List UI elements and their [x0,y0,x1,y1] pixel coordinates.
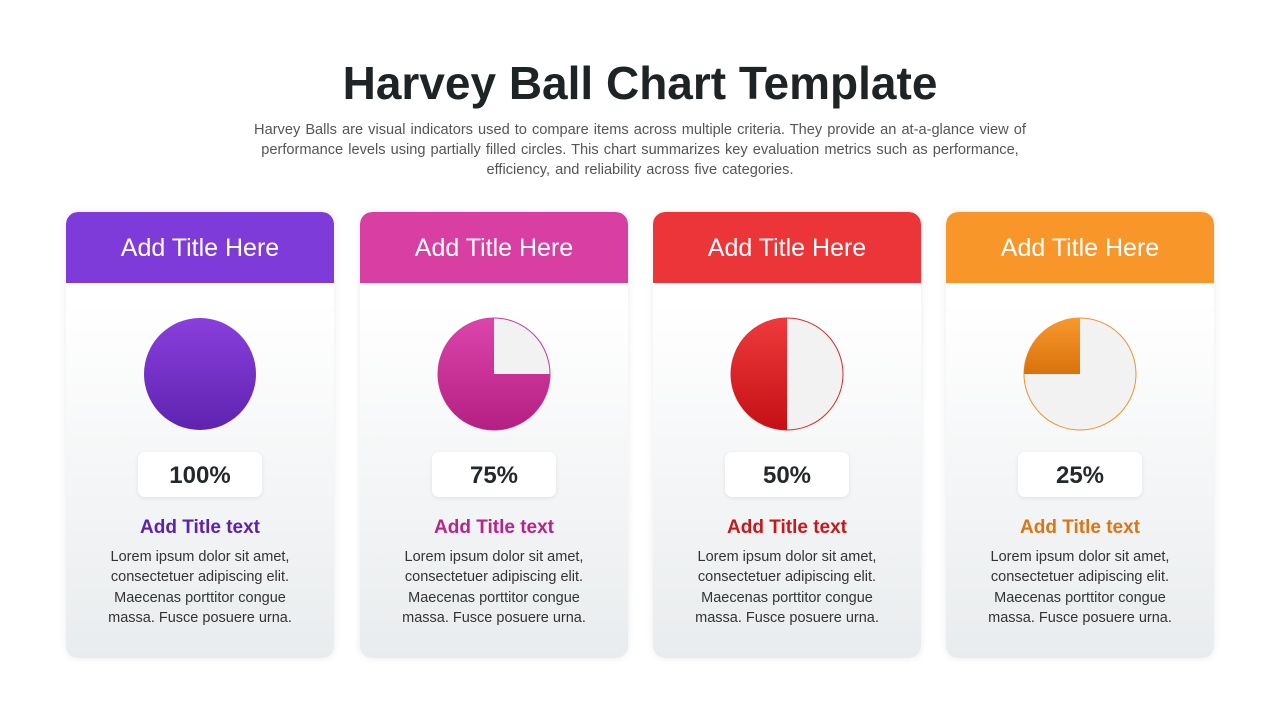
value: 25% [1056,462,1104,489]
body text: Lorem ipsum dolor sit amet, consectetuer adipiscing elit. Maecenas porttitor congue massa. Fusce posuere urna. [988,549,1172,626]
body text: Lorem ipsum dolor sit amet, consectetuer adipiscing elit. Maecenas porttitor congue massa. Fusce posuere urna. [695,549,879,626]
value [138,452,262,497]
panel: 25% [946,212,1214,658]
value [1018,452,1142,497]
icon: harvey ball 50 [730,318,844,430]
subtitle text: Add Title text [727,517,847,538]
header [946,212,1214,283]
value: 50% [763,462,811,489]
value: 75% [470,462,518,489]
panel: 75% [360,212,628,658]
header [66,212,334,283]
body text: Lorem ipsum dolor sit amet, consectetuer adipiscing elit. Maecenas porttitor congue massa. Fusce posuere urna. [402,549,586,626]
title: Harvey Ball Chart Template [343,57,937,109]
value [432,452,556,497]
body text: Lorem ipsum dolor sit amet, consectetuer adipiscing elit. Maecenas porttitor congue massa. Fusce posuere urna. [108,549,292,626]
value [725,452,849,497]
panel: 100% [66,212,334,658]
header: Add Title Here [708,234,866,262]
header [653,212,921,283]
icon: harvey ball 25 [1024,318,1136,430]
icon: harvey ball 75 [438,318,550,430]
panel: 50% [653,212,921,658]
icon: harvey ball 100 [144,318,256,430]
header: Add Title Here [121,234,279,262]
header [360,212,628,283]
value: 100% [169,462,231,489]
subtitle text: Add Title text [434,517,554,538]
subtitle: Harvey Balls are visual indicators used to compare items across multiple criteria. They provide an at-a-glance view of performance levels using partially filled circles. This chart summarizes key evaluation metrics such as performance, efficiency, and reliability across five categories. [254,122,1026,178]
subtitle text: Add Title text [140,517,260,538]
header: Add Title Here [1001,234,1159,262]
subtitle text: Add Title text [1020,517,1140,538]
header: Add Title Here [415,234,573,262]
